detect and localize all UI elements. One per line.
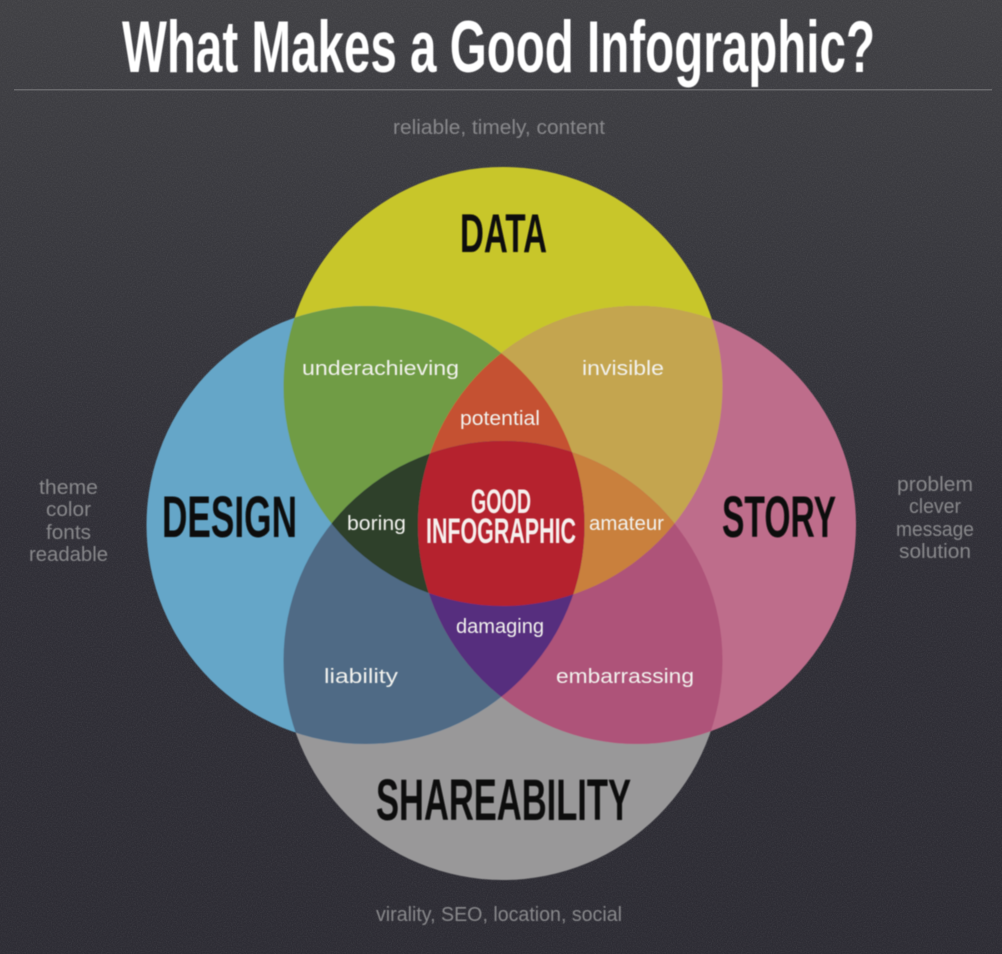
region: data and story: [501, 305, 723, 524]
region: potential: [430, 353, 572, 454]
region: damaging: [428, 502, 584, 697]
label: story: STORY: [722, 485, 836, 550]
label: liability: liability: [324, 666, 398, 688]
circle: design: [146, 306, 584, 744]
label: embarrassing: embarrassing: [556, 666, 694, 688]
text: data attributes: reliable, timely, content: [393, 117, 605, 139]
center label: good infographic: INFOGRAPHIC: [426, 512, 576, 551]
center label: good infographic: GOOD: [471, 483, 531, 521]
title divider: [14, 89, 992, 90]
text: shareability attributes: virality, SEO, location, social: [376, 904, 622, 926]
text: story attributes: clever: [909, 496, 961, 518]
circle: story: [418, 306, 856, 744]
label: underachieving: underachieving: [302, 358, 459, 380]
label: data: DATA: [460, 202, 547, 264]
region: good infographic: [417, 440, 585, 607]
label: design: DESIGN: [162, 485, 297, 550]
text: design attributes: [29, 477, 108, 566]
label: damaging: damaging: [456, 616, 544, 638]
circle labels: [162, 202, 836, 833]
label: potential: potential: [460, 408, 540, 430]
region: data and design: [283, 305, 502, 524]
text: design attributes: readable: [29, 544, 108, 566]
region: amateur: [418, 452, 674, 594]
region: story and shareability: [502, 524, 722, 744]
text: story attributes: message: [896, 519, 974, 541]
label: shareability: SHAREABILITY: [376, 768, 631, 833]
label: boring: boring: [347, 513, 406, 535]
label: amateur: amateur: [589, 513, 664, 535]
text: design attributes: theme: [39, 477, 98, 499]
circle: shareability: [284, 441, 722, 880]
text: story attributes: problem: [897, 474, 973, 496]
circle: data: [284, 167, 722, 606]
region: boring: [332, 453, 430, 594]
intersection labels: [302, 358, 694, 688]
venn diagram: [146, 167, 856, 880]
label: invisible: invisible: [582, 358, 664, 380]
center label: good infographic: [426, 483, 576, 551]
text: design attributes: fonts: [46, 522, 91, 544]
text: story attributes: solution: [899, 541, 971, 563]
region: design and shareability: [283, 524, 502, 744]
text: story attributes: [896, 474, 974, 563]
text: design attributes: color: [46, 499, 91, 521]
